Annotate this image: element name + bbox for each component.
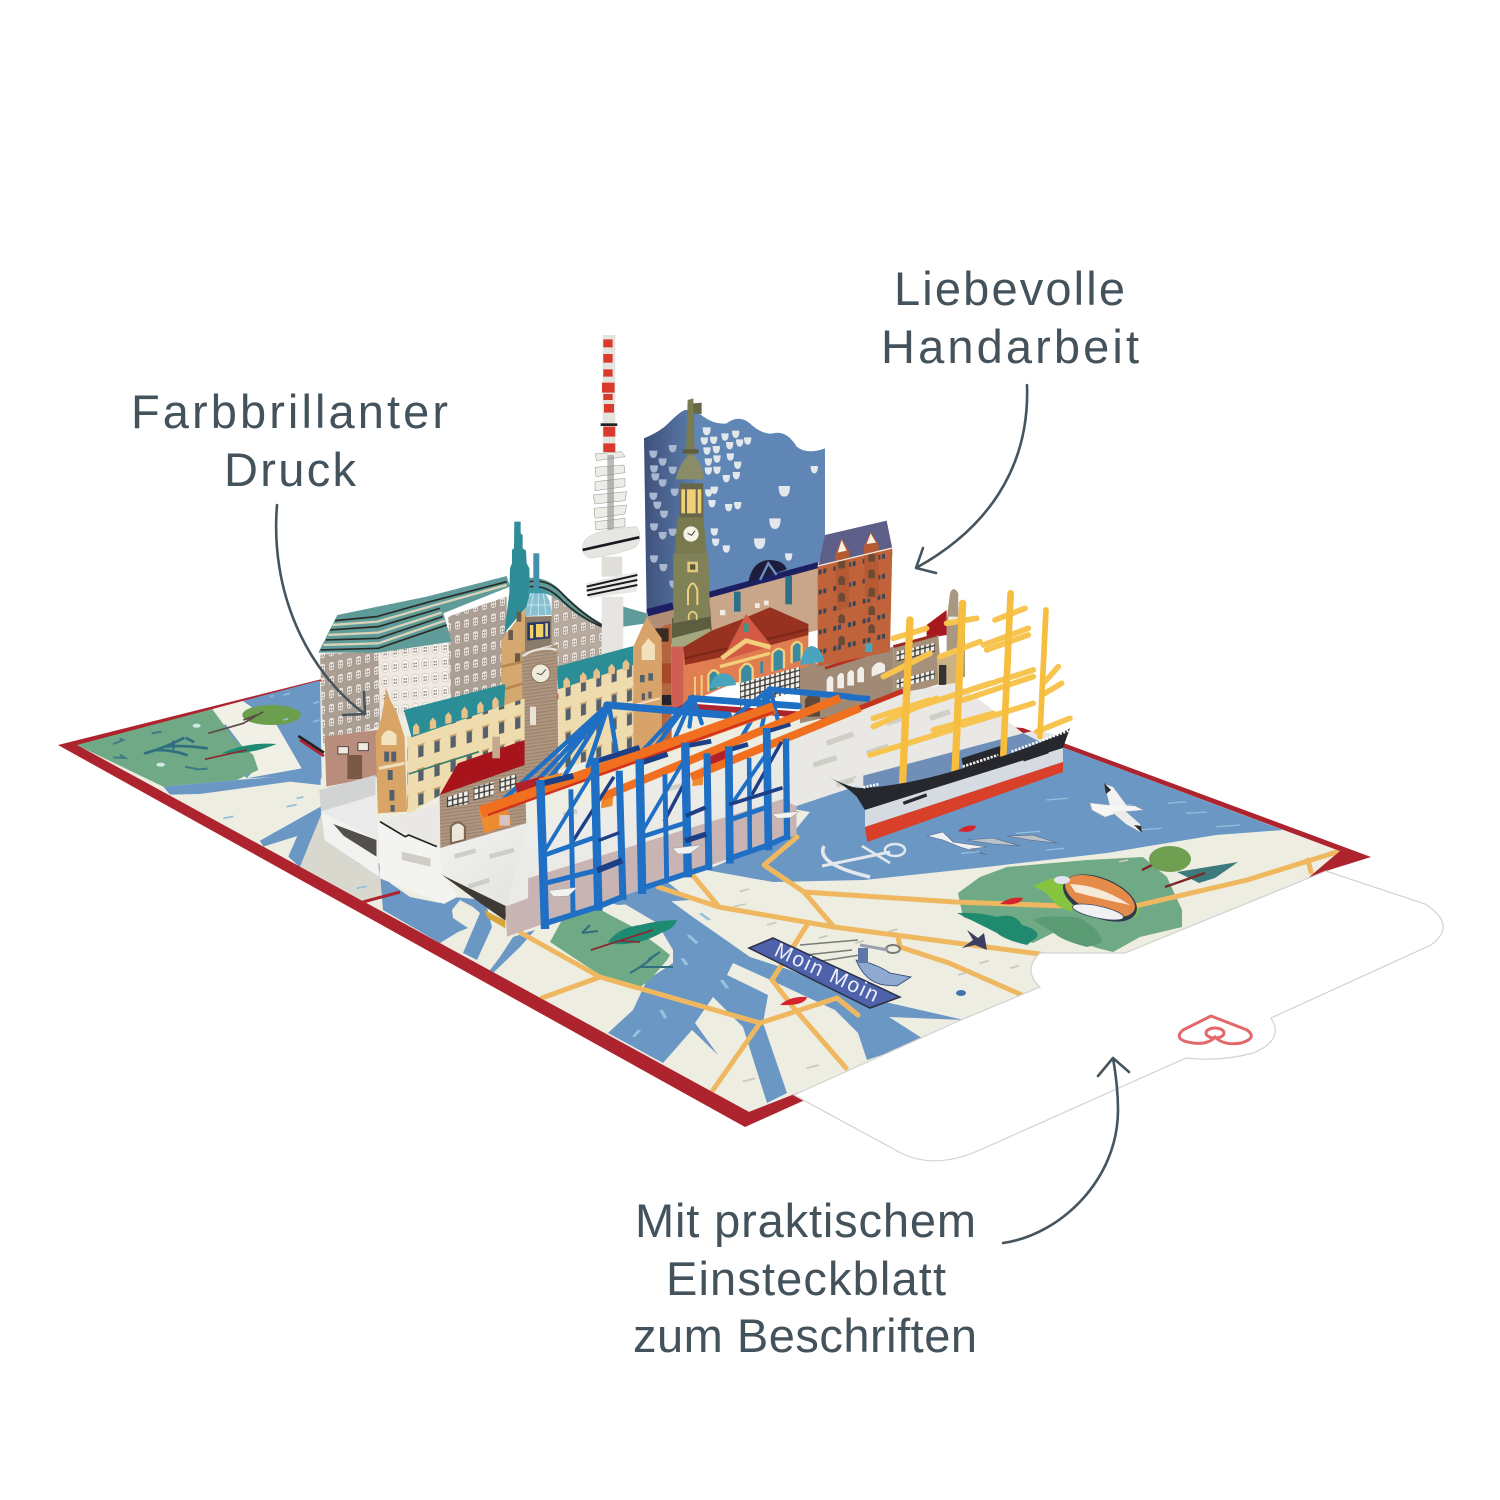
icon: heart logo [1179, 1016, 1251, 1044]
road network [521, 837, 1340, 1090]
crane 3 [729, 725, 788, 860]
label text: Liebevolle [894, 262, 1125, 315]
teal spire and tan building [502, 522, 672, 750]
insert card with heart logo [794, 871, 1443, 1161]
orange crane booms [481, 691, 903, 815]
crane legs and bracing [540, 725, 799, 925]
callout: Liebevolle Handarbeit [881, 262, 1139, 573]
waterfront buildings far right [800, 589, 965, 723]
icon: seagull [1090, 783, 1143, 833]
Chilehaus office building [318, 576, 647, 743]
crane spreader blocks [479, 748, 732, 833]
ship superstructure [853, 730, 1063, 788]
label text: Mit praktischem [635, 1194, 976, 1247]
icon: fish sandwich [1033, 874, 1140, 922]
park with sandwich [957, 857, 1182, 952]
label text: Farbbrillanter [131, 385, 448, 438]
quay surface right of the cranes [783, 683, 1023, 806]
printed map sheet [77, 681, 1340, 1112]
Rathaus and Landungsbruecken tower [325, 522, 672, 848]
warehouse, fish auction hall and waterfront row [672, 398, 965, 723]
sign supports and fish [800, 940, 911, 986]
masts and yards [870, 593, 1070, 782]
Landungsbruecken clock tower [522, 553, 558, 780]
label text: Einsteckblatt [666, 1252, 946, 1305]
fish auction hall with red roof [672, 607, 872, 710]
ship deck [853, 733, 1065, 797]
container gantry cranes [479, 689, 903, 925]
glass window cups [701, 427, 818, 561]
street sign plate [749, 938, 900, 1008]
arrow to print [276, 505, 365, 715]
card base with red border [58, 677, 1371, 1127]
striped roof [318, 576, 647, 653]
four-masted ship Peking [828, 593, 1070, 842]
icon: small bird [962, 930, 987, 950]
icon: swimming figure and fish [927, 832, 1057, 855]
ship hull [828, 728, 1070, 842]
map ticks [634, 798, 1241, 1082]
crane 1 [540, 748, 637, 925]
Speicherstadt brick warehouse [818, 521, 892, 667]
Rathaus right wing [557, 617, 662, 770]
map pins [780, 826, 1023, 1005]
Rathaus left wing, corner tower and brown base [325, 684, 525, 815]
arrow to skyline [916, 385, 1027, 573]
small trees top right [1142, 846, 1238, 887]
Moin Moin street sign [749, 938, 911, 1008]
pop-up card illustration [58, 335, 1444, 1244]
white shelf tabs [548, 811, 799, 897]
street sign text: Moin Moin [771, 939, 882, 1007]
St. Michaelis church tower [672, 398, 712, 653]
arrow to insert [1003, 1058, 1129, 1243]
small building with red roof [440, 737, 526, 848]
quay surface and steps [319, 717, 851, 937]
label text: Handarbeit [881, 320, 1139, 373]
callout: Mit praktischem Einsteckblatt zum Beschriften [633, 1058, 1129, 1362]
concert hall base and dome [647, 560, 818, 657]
crane tower trusses [500, 689, 850, 803]
label text: Druck [224, 443, 356, 496]
quay paper structure [319, 683, 1023, 937]
left map area: park and rivers [77, 678, 390, 903]
back row: TV tower and Elbphilharmonie [582, 335, 825, 657]
park left with tree [550, 908, 677, 987]
infographic canvas [58, 270, 1444, 1352]
Heinrich-Hertz TV tower [582, 335, 640, 657]
Elbphilharmonie [644, 410, 825, 657]
icon: anchor [822, 844, 905, 877]
icon: trees and plants [113, 705, 301, 769]
label text: zum Beschriften [633, 1309, 977, 1362]
callout: Farbbrillanter Druck [131, 385, 448, 715]
crane 2 [640, 742, 709, 890]
rivers in the foreground [378, 748, 1283, 1103]
